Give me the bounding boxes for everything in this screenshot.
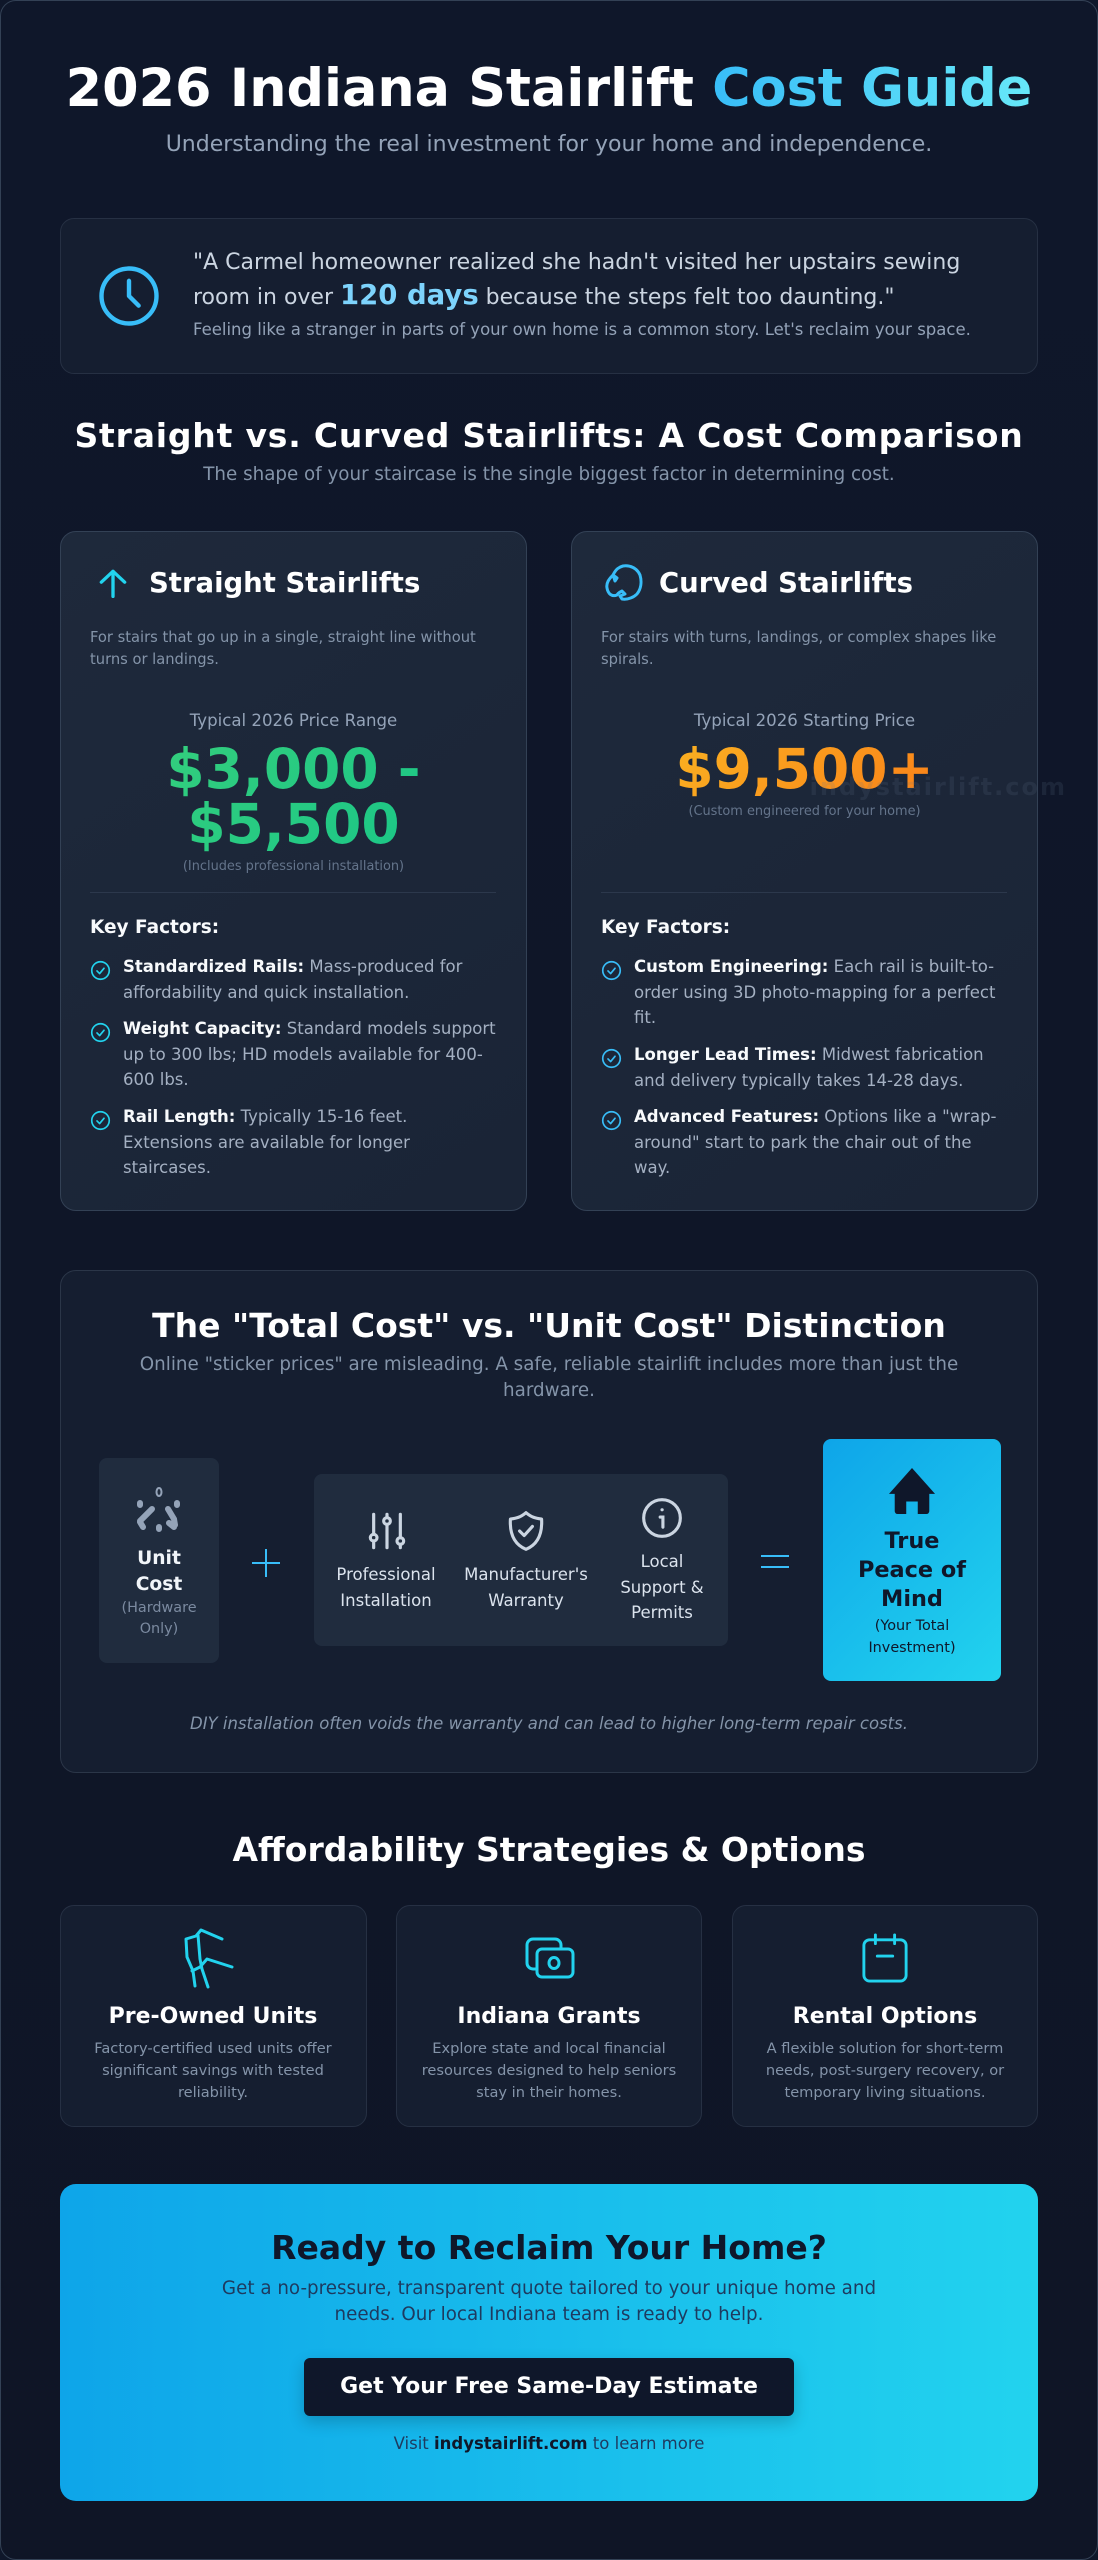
label: Permits	[631, 1603, 693, 1622]
card title: Rental Options	[793, 2004, 977, 2029]
icon: shield check	[508, 1511, 544, 1551]
subtitle: Understanding the real investment for your home and independence.	[166, 132, 932, 157]
panel: curved stairlifts	[571, 531, 1038, 1211]
factor: way.	[634, 1158, 670, 1177]
key factors heading: Key Factors:	[90, 917, 219, 938]
label: Mind	[881, 1586, 943, 1612]
icon: pre-owned stairlift chair	[184, 1928, 234, 1988]
icon: check	[90, 960, 110, 980]
footnote: DIY installation often voids the warranty and can lead to higher long-term repair costs.	[190, 1714, 908, 1733]
price note: (Custom engineered for your home)	[688, 804, 921, 819]
label	[858, 1528, 966, 1612]
price label: Typical 2026 Starting Price	[694, 711, 915, 730]
card description	[90, 629, 476, 668]
list: key factors	[90, 957, 496, 1177]
icon: check	[602, 960, 622, 980]
text: Get a no-pressure, transparent quote tailored to your unique home and	[222, 2278, 876, 2299]
label	[136, 1548, 182, 1595]
icon: info	[642, 1498, 682, 1538]
panel: pre-owned units	[60, 1905, 366, 2127]
key factors heading: Key Factors:	[601, 917, 730, 938]
heading: The "Total Cost" vs. "Unit Cost" Distinction	[152, 1306, 946, 1345]
factor	[123, 957, 462, 1002]
card text: Factory-certified used units offer	[94, 2040, 332, 2057]
watermark: indystairlift.com	[810, 773, 1067, 801]
factor: up to 300 lbs; HD models available for 400-	[123, 1045, 483, 1064]
note: Investment)	[868, 1640, 956, 1656]
box: true peace of mind	[823, 1439, 1001, 1681]
note	[868, 1618, 956, 1656]
note: (Hardware	[121, 1600, 197, 1616]
card text: resources designed to help seniors	[422, 2062, 676, 2079]
factor: Advanced Features: Options like a "wrap-	[634, 1107, 997, 1126]
card title: Indiana Grants	[457, 2004, 641, 2029]
comparison subtitle: The shape of your staircase is the single biggest factor in determining cost.	[203, 464, 895, 485]
divider	[90, 892, 496, 893]
panel: quote	[60, 218, 1038, 374]
factor: staircases.	[123, 1158, 211, 1177]
factor	[634, 957, 996, 1027]
card text	[94, 2040, 332, 2101]
section description	[140, 1354, 958, 1400]
note	[121, 1600, 197, 1636]
card description: For stairs with turns, landings, or complex shapes like	[601, 629, 996, 646]
card description: turns or landings.	[90, 651, 219, 668]
icon: house	[889, 1468, 935, 1514]
icon: check	[90, 1022, 110, 1042]
label: Peace of	[858, 1557, 966, 1583]
icon: check	[602, 1048, 622, 1068]
card description: For stairs that go up in a single, straight line without	[90, 629, 476, 646]
icon: sliders	[368, 1512, 406, 1550]
panel: total cost vs unit cost	[60, 1270, 1038, 1773]
price: $3,000 -	[166, 736, 421, 800]
quote text: room in over 120 days because the steps felt too daunting."	[193, 279, 894, 311]
factor: Longer Lead Times: Midwest fabrication	[634, 1045, 984, 1064]
factor: Rail Length: Typically 15-16 feet.	[123, 1107, 407, 1126]
heading: comparison: Straight vs. Curved Stairlifts: A Cost Comparison	[74, 416, 1024, 455]
card description: spirals.	[601, 651, 654, 668]
label	[620, 1552, 704, 1622]
price label: Typical 2026 Price Range	[190, 711, 397, 730]
price	[61, 742, 526, 852]
factor: and delivery typically takes 14-28 days.	[634, 1071, 963, 1090]
factor: affordability and quick installation.	[123, 983, 409, 1002]
list: key factors	[602, 957, 997, 1177]
factor	[634, 1107, 997, 1177]
quote note: Feeling like a stranger in parts of your own home is a common story. Let's reclaim your space.	[193, 320, 971, 339]
divider	[601, 892, 1007, 893]
heading: Ready to Reclaim Your Home?	[271, 2228, 827, 2267]
card title: Pre-Owned Units	[109, 2004, 317, 2029]
card text: needs, post-surgery recovery, or	[766, 2062, 1004, 2079]
label: Support &	[620, 1578, 704, 1597]
quote text: "A Carmel homeowner realized she hadn't visited her upstairs sewing	[193, 250, 960, 275]
factor	[634, 1045, 984, 1090]
label: Unit	[137, 1548, 181, 1569]
factor: Standardized Rails: Mass-produced for	[123, 957, 462, 976]
factor: Extensions are available for longer	[123, 1133, 410, 1152]
panel: indiana grants	[396, 1905, 702, 2127]
factor: order using 3D photo-mapping for a perfect	[634, 983, 995, 1002]
icon: clock	[99, 266, 159, 326]
label: Manufacturer's	[464, 1565, 588, 1584]
label: True	[884, 1528, 939, 1554]
card text: temporary living situations.	[784, 2084, 986, 2101]
label: Installation	[340, 1591, 432, 1610]
factor	[123, 1019, 496, 1089]
card title: Curved Stairlifts	[659, 567, 913, 599]
card text: stay in their homes.	[476, 2084, 622, 2101]
box: included services	[314, 1474, 728, 1646]
factor: around" start to park the chair out of the	[634, 1133, 972, 1152]
button label: Get Your Free Same-Day Estimate	[340, 2374, 758, 2399]
icon: calendar	[861, 1934, 909, 1982]
card text	[733, 2038, 1037, 2104]
card text: Explore state and local financial	[432, 2040, 666, 2057]
label	[464, 1565, 588, 1610]
icon: equals	[761, 1555, 789, 1568]
price	[572, 742, 1037, 796]
label	[336, 1565, 436, 1610]
price: $5,500	[187, 792, 400, 856]
factor: Custom Engineering: Each rail is built-to-	[634, 957, 994, 976]
text: needs. Our local Indiana team is ready to help.	[335, 2304, 763, 2325]
note: (Your Total	[875, 1618, 949, 1634]
card title: Straight Stairlifts	[149, 567, 420, 599]
label: Warranty	[488, 1591, 564, 1610]
label: Local	[641, 1552, 683, 1571]
card text: significant savings with tested	[102, 2062, 324, 2079]
card text	[422, 2040, 676, 2101]
section description: hardware.	[503, 1380, 595, 1400]
text	[60, 2276, 1038, 2327]
panel: straight stairlifts	[60, 531, 527, 1211]
link line: Visit indystairlift.com to learn more	[394, 2434, 704, 2453]
price: $9,500+	[675, 736, 934, 800]
card text: A flexible solution for short-term	[767, 2040, 1003, 2057]
panel: call to action	[60, 2184, 1038, 2501]
title: 2026 Indiana Stairlift Cost Guide	[66, 58, 1032, 119]
card description	[601, 629, 996, 668]
note: Only)	[140, 1620, 178, 1636]
icon: check	[602, 1110, 622, 1130]
button	[304, 2358, 794, 2416]
label: Professional	[336, 1565, 436, 1584]
label: Cost	[136, 1574, 182, 1595]
panel: rental options	[732, 1905, 1038, 2127]
icon: curved blob	[605, 564, 642, 601]
icon: wrench scatter	[137, 1487, 180, 1532]
box: unit cost	[99, 1458, 219, 1663]
section description: Online "sticker prices" are misleading. A safe, reliable stairlift includes more than just the	[140, 1354, 958, 1375]
icon: money	[526, 1938, 574, 1978]
quote text	[193, 250, 960, 311]
factor: Weight Capacity: Standard models support	[123, 1019, 496, 1038]
card text: reliability.	[178, 2084, 248, 2101]
icon: check	[90, 1110, 110, 1130]
icon: arrow up	[100, 570, 126, 598]
factor: fit.	[634, 1008, 656, 1027]
factor	[123, 1107, 410, 1177]
factor: 600 lbs.	[123, 1070, 189, 1089]
price note: (Includes professional installation)	[183, 859, 404, 874]
icon: plus	[252, 1549, 280, 1577]
heading: affordability: Affordability Strategies & Options	[233, 1830, 865, 1869]
